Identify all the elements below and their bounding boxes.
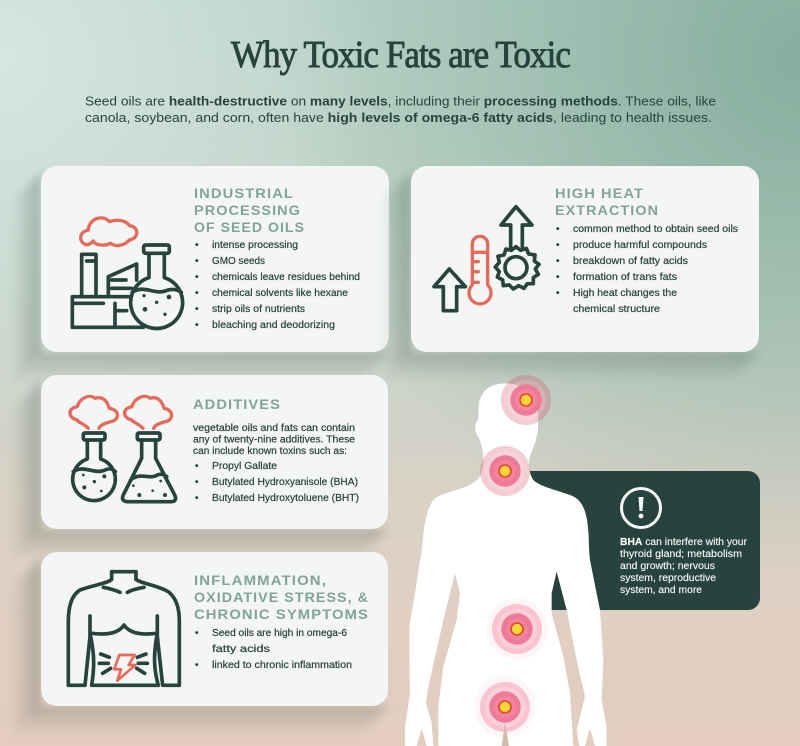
bullet list [195,240,360,331]
heading: OF SEED OILS [194,220,305,235]
bullet list: formation of trans fats [573,272,677,283]
bullet list: • [195,660,199,671]
bullet list: • [556,240,560,251]
bullet list: • [195,272,199,283]
paragraph: any of twenty-nine additives. These [193,434,355,446]
bullet list: • [195,320,199,331]
heading [194,186,305,235]
bullet list [556,224,738,315]
bullet list: bleaching and deodorizing [212,320,335,331]
bullet list: • [195,256,199,267]
bullet list: Butylated Hydroxytoluene (BHT) [212,493,359,504]
bullet list: • [195,493,199,504]
heading: OXIDATIVE STRESS, & [194,590,369,605]
callout text: thyroid gland; metabolism [620,549,742,560]
human body silhouette [405,383,607,746]
bullet list: produce harmful compounds [573,240,707,251]
icon: torso with bolt [68,572,179,685]
target: pelvis [474,676,536,738]
callout text: and growth; nervous [620,561,715,572]
heading: CHRONIC SYMPTOMS [194,607,369,622]
heading: HIGH HEAT [555,186,644,201]
callout text [620,537,748,596]
icon: arrows thermometer gear [434,207,539,311]
panel: high heat extraction [376,166,759,387]
bullet list: • [556,272,560,283]
bullet list: GMO seeds [212,256,265,267]
bullet list: • [556,288,560,299]
bullet list: • [556,256,560,267]
bullet list: chemical solvents like hexane [212,288,348,299]
callout: BHA [515,471,760,610]
icon: exclamation [622,488,660,528]
callout text: system, and more [620,585,702,596]
bullet list: High heat changes the [573,288,677,299]
bullet list: • [195,628,199,639]
heading [194,573,369,622]
heading: INDUSTRIAL [194,186,294,201]
callout text: BHA can interfere with your [620,537,748,548]
target: abdomen [486,598,548,660]
bullet list: intense processing [212,240,298,251]
callout text: system, reproductive [620,573,716,584]
heading: ADDITIVES [193,397,281,412]
bullet list: breakdown of fatty acids [573,256,688,267]
bullet list: • [195,461,199,472]
bullet list: linked to chronic inflammation [212,660,352,671]
intro text [85,94,716,125]
icon: two flasks [70,396,176,502]
bullet list: common method to obtain seed oils [573,224,738,235]
bullet list: fatty acids [212,644,270,655]
bullet list: • [195,304,199,315]
heading: PROCESSING [194,203,301,218]
bullet list: Seed oils are high in omega-6 [212,628,347,639]
heading: EXTRACTION [555,203,659,218]
bullet list: • [195,240,199,251]
bullet list [195,628,352,671]
target: neck [480,446,530,496]
bullet list: • [195,288,199,299]
bullet list: chemicals leave residues behind [212,272,360,283]
paragraph: vegetable oils and fats can contain [193,423,355,434]
intro text: canola, soybean, and corn, often have high levels of omega-6 fatty acids , leading to health issues. [85,110,712,125]
bullet list: Propyl Gallate [212,461,277,472]
heading: INFLAMMATION, [194,573,327,588]
paragraph: can include known toxins such as: [193,446,347,457]
target: head [501,375,551,425]
bullet list: strip oils of nutrients [212,304,305,315]
panel: additives [6,375,388,564]
title: Why Toxic Fats are Toxic [231,34,570,76]
bullet list: • [195,477,199,488]
bullet list: • [556,224,560,235]
paragraph [193,423,355,457]
bullet list [195,461,359,504]
bullet list: chemical structure [573,304,660,315]
intro text: Seed oils are health-destructive on many levels , including their processing methods . These oils, like [85,94,716,108]
panel: industrial processing [6,166,389,387]
gap between the legs [502,722,509,746]
bullet list: Butylated Hydroxyanisole (BHA) [212,477,358,488]
icon: factory and flask [72,218,183,328]
panel: inflammation [6,552,388,741]
heading [555,186,659,218]
